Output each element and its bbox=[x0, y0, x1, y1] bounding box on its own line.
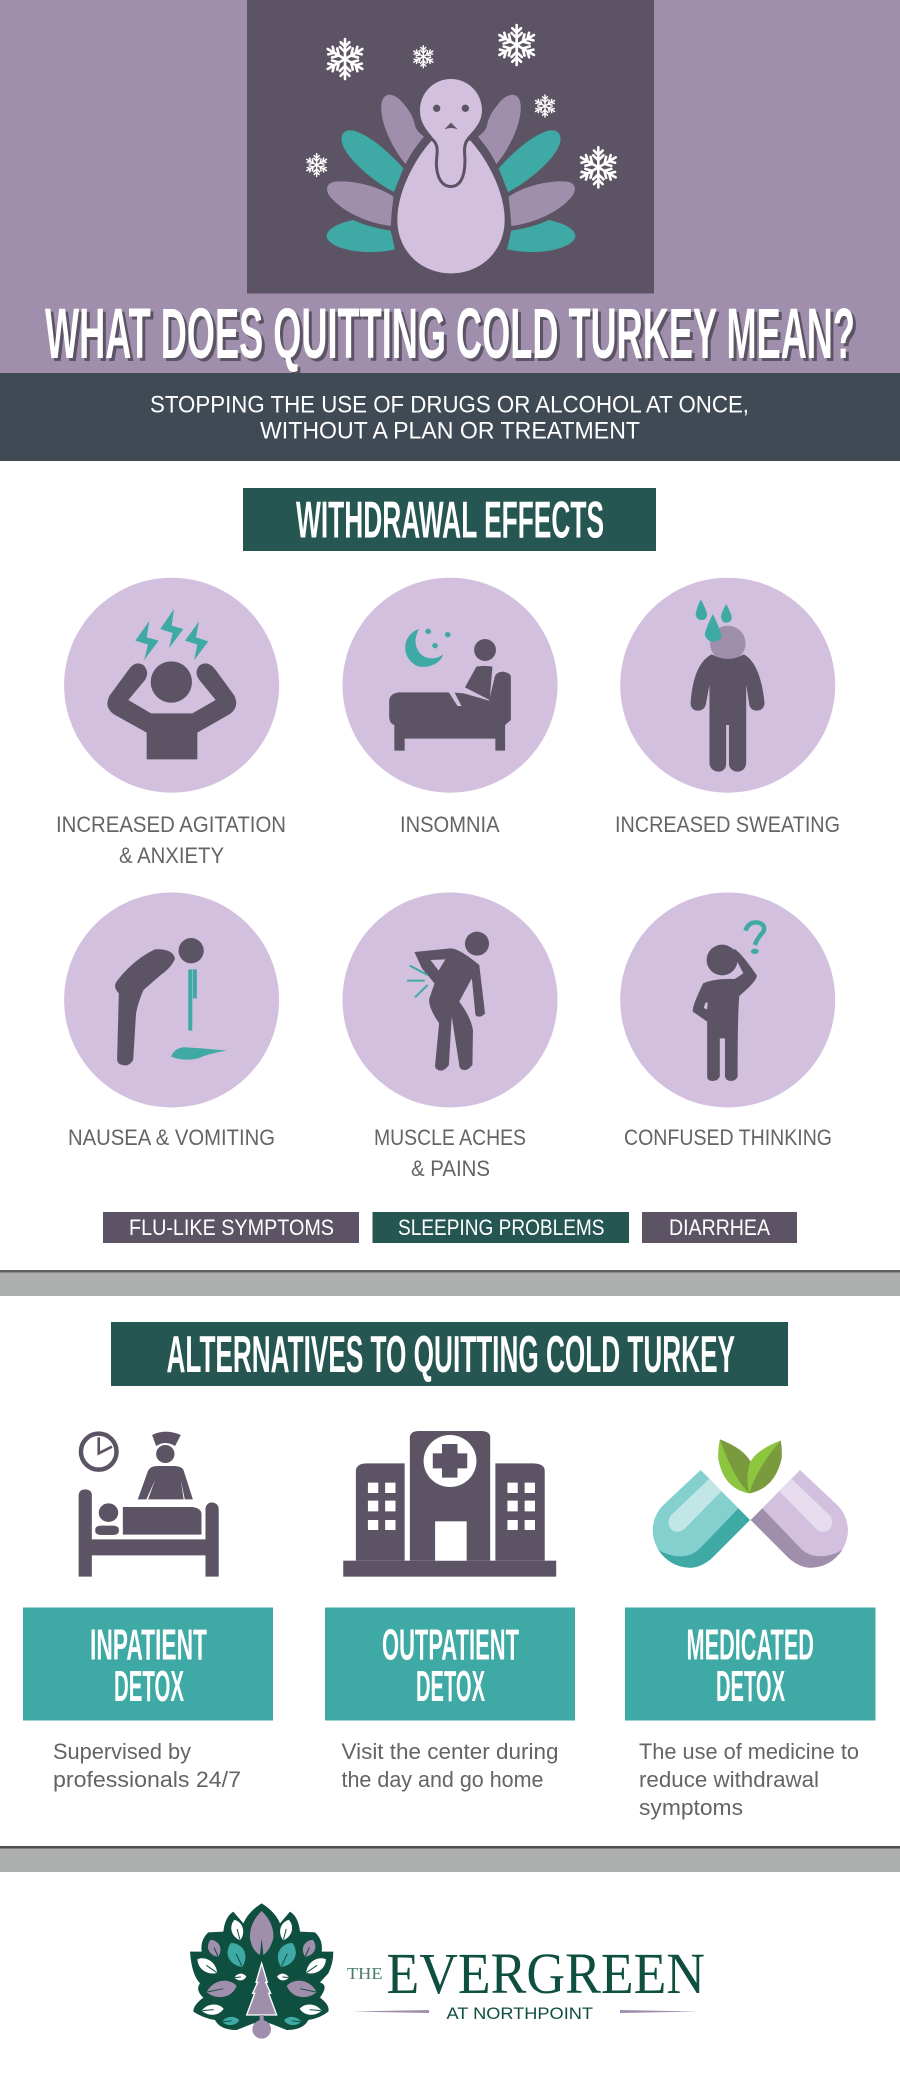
label: INCREASED AGITATION bbox=[56, 812, 286, 837]
logo emblem bbox=[190, 1903, 333, 2039]
card: inpatient detox: DETOX bbox=[114, 1662, 184, 1711]
label bbox=[56, 812, 286, 868]
label: NAUSEA & VOMITING bbox=[68, 1125, 275, 1150]
label bbox=[374, 1125, 526, 1181]
card: medicated detox: DETOX bbox=[716, 1662, 785, 1711]
heading: withdrawal effects: WITHDRAWAL EFFECTS bbox=[296, 492, 604, 550]
icon: agitated person bbox=[107, 609, 236, 759]
card: outpatient detox: OUTPATIENT bbox=[382, 1620, 519, 1670]
icon: vomiting person bbox=[115, 938, 227, 1065]
panel: increased sweating bbox=[615, 578, 840, 837]
icon: hospital bbox=[343, 1431, 556, 1577]
tag: diarrhea: DIARRHEA bbox=[669, 1215, 770, 1240]
icon: person awake in bed bbox=[389, 629, 511, 751]
card: medicated detox bbox=[625, 1608, 876, 1720]
logo wordmark: THE bbox=[347, 1964, 382, 1983]
tag: sleeping problems: SLEEPING PROBLEMS bbox=[398, 1215, 604, 1240]
text: medicated description: symptoms bbox=[639, 1795, 743, 1820]
tag: flu-like symptoms: FLU-LIKE SYMPTOMS bbox=[129, 1215, 334, 1240]
icon: turkey with snowflakes bbox=[305, 25, 618, 273]
tag: diarrhea bbox=[642, 1212, 797, 1243]
logo wordmark bbox=[347, 1941, 705, 2023]
divider bar bbox=[0, 1846, 900, 1872]
text: medicated description: The use of medicine to bbox=[639, 1739, 859, 1764]
text: inpatient description bbox=[53, 1739, 241, 1792]
divider bar bbox=[0, 1270, 900, 1296]
panel: definition band: WITHOUT A PLAN OR TREATMENT bbox=[260, 418, 640, 444]
card: inpatient detox: INPATIENT bbox=[90, 1620, 207, 1670]
panel: agitation and anxiety bbox=[56, 578, 286, 868]
text: outpatient description: Visit the center during bbox=[342, 1739, 558, 1764]
icon: person holding back bbox=[407, 932, 489, 1071]
card: outpatient detox bbox=[325, 1608, 575, 1720]
icon: confused person bbox=[693, 922, 764, 1081]
icon: sweating person bbox=[691, 599, 765, 772]
panel: definition band bbox=[0, 373, 900, 461]
logo wordmark: AT NORTHPOINT bbox=[446, 2004, 593, 2023]
heading: withdrawal effects bbox=[243, 488, 656, 551]
panel: turkey illustration bbox=[247, 0, 654, 294]
card: inpatient detox bbox=[23, 1608, 273, 1720]
text: inpatient description: Supervised by bbox=[53, 1739, 191, 1764]
label: & ANXIETY bbox=[119, 843, 224, 868]
panel: confused thinking bbox=[620, 892, 835, 1150]
card: outpatient detox: DETOX bbox=[416, 1662, 485, 1711]
panel: insomnia bbox=[342, 578, 558, 837]
header background bbox=[0, 0, 900, 373]
icon: nurse and patient in bed bbox=[79, 1432, 219, 1577]
logo wordmark: EVERGREEN bbox=[386, 1941, 705, 2006]
icon: capsules and leaves bbox=[653, 1439, 848, 1568]
label: CONFUSED THINKING bbox=[624, 1125, 832, 1150]
text: medicated description: reduce withdrawal bbox=[639, 1767, 819, 1792]
panel: nausea and vomiting bbox=[64, 892, 279, 1150]
label: INCREASED SWEATING bbox=[615, 812, 840, 837]
label: INSOMNIA bbox=[400, 812, 500, 837]
text: medicated description bbox=[639, 1739, 859, 1820]
panel: muscle aches and pains bbox=[342, 892, 558, 1181]
label: MUSCLE ACHES bbox=[374, 1125, 526, 1150]
label: & PAINS bbox=[411, 1156, 490, 1181]
panel: definition band: STOPPING THE USE OF DRUGS OR ALCOHOL AT ONCE, bbox=[150, 392, 749, 418]
text: outpatient description bbox=[342, 1739, 558, 1792]
text: inpatient description: professionals 24/7 bbox=[53, 1767, 241, 1792]
text: outpatient description: the day and go home bbox=[342, 1767, 544, 1792]
